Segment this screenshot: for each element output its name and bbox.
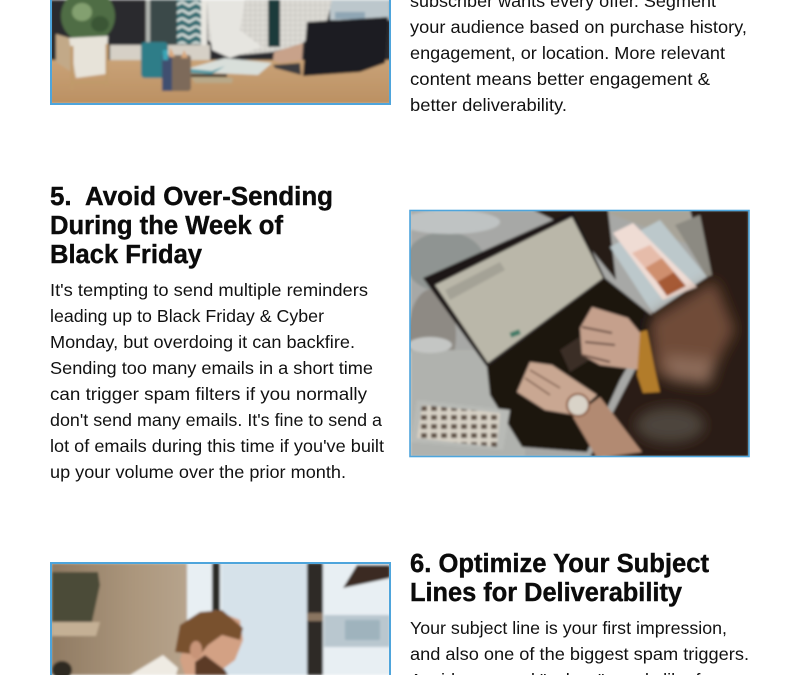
heading: tip 5: 5. Avoid Over-Sending — [50, 183, 333, 211]
heading: tip 6: 6. Optimize Your Subject — [410, 550, 710, 578]
text block: tip 5 paragraph: can trigger spam filters if you normally — [50, 384, 367, 404]
text block: tip 5 paragraph: It's tempting to send multiple reminders — [50, 280, 368, 300]
text block: tip 5 paragraph — [50, 280, 384, 482]
heading: tip 5: Black Friday — [50, 241, 203, 269]
text block: segmentation paragraph (continued): content means better engagement & — [410, 69, 710, 89]
photo: desk with laptop, plant and pencil cup — [50, 0, 391, 104]
heading: tip 5: During the Week of — [50, 212, 283, 240]
text block: tip 5 paragraph: Monday, but overdoing it can backfire. — [50, 332, 355, 352]
heading: tip 5 — [50, 183, 333, 269]
text block: segmentation paragraph (continued): engagement, or location. More relevant — [410, 43, 725, 63]
text block: tip 6 paragraph: Your subject line is your first impression, — [410, 618, 727, 638]
text block: tip 5 paragraph: Sending too many emails in a short time — [50, 358, 373, 378]
text block: segmentation paragraph (continued) — [410, 0, 747, 115]
photo: hands typing on laptop on a blanket — [400, 210, 749, 458]
text block: tip 5 paragraph: lot of emails during this time if you've built — [50, 436, 384, 456]
text block: tip 5 paragraph: up your volume over the prior month. — [50, 462, 346, 482]
text block: tip 6 paragraph: and also one of the biggest spam triggers. — [410, 644, 749, 664]
text block: tip 6 paragraph — [410, 618, 749, 675]
text block: segmentation paragraph (continued): better deliverability. — [410, 95, 567, 115]
heading: tip 6 — [410, 550, 710, 607]
heading: tip 6: Lines for Deliverability — [410, 579, 683, 607]
photo: bearded man at window — [51, 563, 390, 675]
text block: tip 5 paragraph: leading up to Black Friday & Cyber — [50, 306, 324, 326]
text block: tip 5 paragraph: don't send many emails. It's fine to send a — [50, 410, 382, 430]
text block: segmentation paragraph (continued): your audience based on purchase history, — [410, 17, 747, 37]
